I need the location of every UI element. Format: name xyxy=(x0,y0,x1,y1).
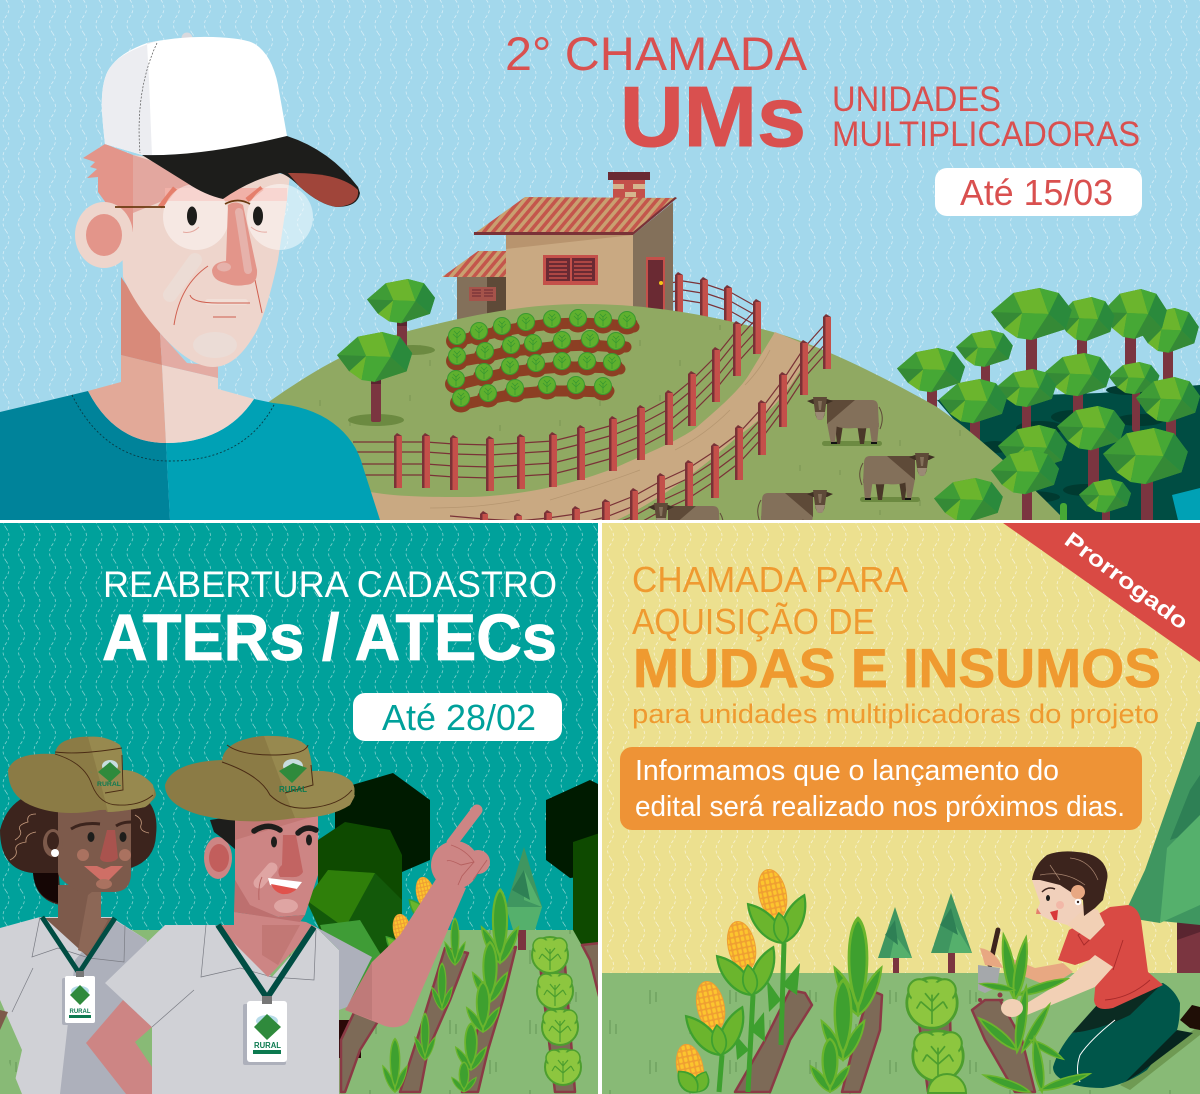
neck xyxy=(88,277,254,443)
chimney xyxy=(608,172,650,200)
ribbon: Prorrogado: Prorrogado xyxy=(1060,527,1193,634)
heading: mudas e insumos: AQUISIÇÃO DE xyxy=(632,601,875,642)
gardener near hand xyxy=(1001,999,1023,1017)
notice box: Informamos que o lançamento do xyxy=(635,755,1059,787)
main roof xyxy=(474,197,677,235)
man face xyxy=(235,815,318,917)
small pine right xyxy=(931,893,972,973)
window xyxy=(543,255,598,285)
heading: ATERs / ATECs: REABERTURA CADASTRO xyxy=(103,564,557,605)
man hat logo: RURAL xyxy=(279,785,307,794)
panel: ATERs xyxy=(0,523,600,1094)
forest dark ground xyxy=(937,385,1200,520)
face wrinkles xyxy=(170,227,267,358)
panel: mudas e insumos xyxy=(602,523,1200,1094)
woman face xyxy=(58,808,131,892)
tree: small on hill xyxy=(367,279,435,355)
deadline badge: 15/03: Até 15/03 xyxy=(960,172,1113,213)
heading: ATERs / ATECs xyxy=(102,564,557,674)
woman hat xyxy=(8,737,156,813)
vegetable garden xyxy=(445,310,638,412)
cap visor xyxy=(142,136,360,207)
gardener ground shadow xyxy=(1120,1025,1200,1090)
man left arm xyxy=(86,1000,152,1094)
panel: top sky scene xyxy=(0,0,1200,568)
man hat logo xyxy=(279,759,307,794)
small pine xyxy=(506,847,542,950)
woman neck xyxy=(45,885,115,958)
soil rows xyxy=(735,990,1035,1092)
dark trees xyxy=(306,773,600,1058)
woman shirt xyxy=(0,917,160,1094)
annex xyxy=(442,251,506,322)
woman hat logo: RURAL xyxy=(97,781,121,788)
gardener shoe xyxy=(1180,1005,1200,1030)
nose xyxy=(212,202,257,286)
hill xyxy=(250,304,1065,520)
woman hair xyxy=(0,790,156,905)
cow 3 xyxy=(757,490,833,520)
deadline badge: 15/03 xyxy=(935,168,1142,216)
gardener woman xyxy=(976,851,1200,1094)
gardener dark waist xyxy=(1072,983,1175,1033)
man facial features xyxy=(254,826,316,913)
lettuces xyxy=(445,310,638,412)
road xyxy=(370,332,812,520)
gardener near arm xyxy=(1003,955,1113,1015)
soil crumbs xyxy=(978,992,1004,1002)
road texture xyxy=(430,350,770,508)
ear xyxy=(75,202,133,268)
man ID badge: RURAL xyxy=(254,1041,281,1050)
man hair xyxy=(210,816,236,850)
man neck xyxy=(216,912,316,977)
extension agent man xyxy=(86,736,490,1094)
soil rows xyxy=(341,943,600,1092)
trowel xyxy=(978,930,1003,993)
heading: mudas e insumos: CHAMADA PARA xyxy=(632,559,908,600)
cow 1 xyxy=(807,397,882,446)
heading: mudas e insumos: para unidades multiplicadoras do projeto xyxy=(632,699,1159,729)
heading: UMs xyxy=(505,27,1140,165)
front forest trees xyxy=(934,406,1200,523)
woman ID badge xyxy=(62,971,96,1025)
man shirt xyxy=(105,925,372,1094)
extension agent woman xyxy=(0,737,160,1094)
gardener shin xyxy=(1125,1030,1193,1082)
deadline badge: 28/02 xyxy=(353,693,562,741)
heading: UMs: MULTIPLICADORAS xyxy=(832,115,1140,154)
rear fence xyxy=(673,272,753,324)
heading: ATERs / ATECs: ATERs / ATECs xyxy=(102,600,557,674)
held plant xyxy=(979,934,1069,1001)
heading: UMs: UMs xyxy=(620,70,806,165)
heading: mudas e insumos: MUDAS E INSUMOS xyxy=(633,637,1161,699)
man hat xyxy=(165,736,355,821)
woman ID badge: RURAL xyxy=(70,1008,91,1015)
man right arm and hand xyxy=(345,810,490,1027)
woman lanyard xyxy=(42,917,115,973)
notice box: edital será realizado nos próximos dias. xyxy=(635,791,1125,823)
cow 4 xyxy=(648,503,724,520)
grass ticks xyxy=(320,325,990,515)
eyes xyxy=(187,206,263,226)
woman ear and earring xyxy=(43,829,63,857)
gardener far arm xyxy=(1003,955,1073,987)
corn in rows xyxy=(405,875,451,929)
last corn ear xyxy=(672,1042,712,1094)
glasses xyxy=(115,184,313,250)
leafy plants xyxy=(807,919,886,1094)
heading: UMs: UNIDADES xyxy=(832,80,1001,119)
farmhouse xyxy=(442,172,677,322)
door xyxy=(646,257,665,312)
side wall xyxy=(633,202,673,312)
deadline badge: 28/02: Até 28/02 xyxy=(382,697,536,738)
man lanyard xyxy=(218,925,314,998)
corn plants xyxy=(672,867,813,1094)
notice box xyxy=(620,747,1142,830)
front wall xyxy=(506,235,633,316)
heading: mudas e insumos xyxy=(632,559,1161,729)
tree: large on hill xyxy=(337,332,412,426)
big pine xyxy=(1123,722,1200,975)
crop stems xyxy=(380,890,522,1094)
woman hat logo xyxy=(97,760,121,788)
heading: UMs: 2° CHAMADA xyxy=(505,27,808,80)
forest shadows xyxy=(979,385,1164,503)
small pine left xyxy=(878,907,912,973)
face xyxy=(122,155,290,367)
shirt xyxy=(0,391,380,520)
woman facial features xyxy=(71,822,131,889)
ribbon: Prorrogado xyxy=(1003,523,1200,662)
planted seedlings xyxy=(976,986,1091,1094)
ground xyxy=(0,930,598,1094)
lettuces xyxy=(907,978,966,1093)
inner fence xyxy=(353,299,761,491)
gardener neck xyxy=(1067,905,1105,940)
outer fence xyxy=(450,314,831,520)
gardener features xyxy=(1036,888,1064,920)
soil rows xyxy=(456,323,634,405)
cow 2 xyxy=(860,453,935,502)
gardener shirt xyxy=(1058,905,1163,1009)
lettuce row xyxy=(532,937,581,1085)
man ear xyxy=(204,837,232,879)
cap xyxy=(102,32,360,207)
ground xyxy=(602,973,1200,1094)
hair and head side xyxy=(83,144,133,240)
rear forest trees xyxy=(897,288,1200,450)
man ID badge xyxy=(243,996,287,1065)
gardener ear and earring xyxy=(1071,885,1085,905)
gardener hair xyxy=(1032,851,1108,916)
farmer xyxy=(0,32,380,520)
gardener face xyxy=(1032,880,1083,925)
gardener pants xyxy=(1053,983,1180,1088)
